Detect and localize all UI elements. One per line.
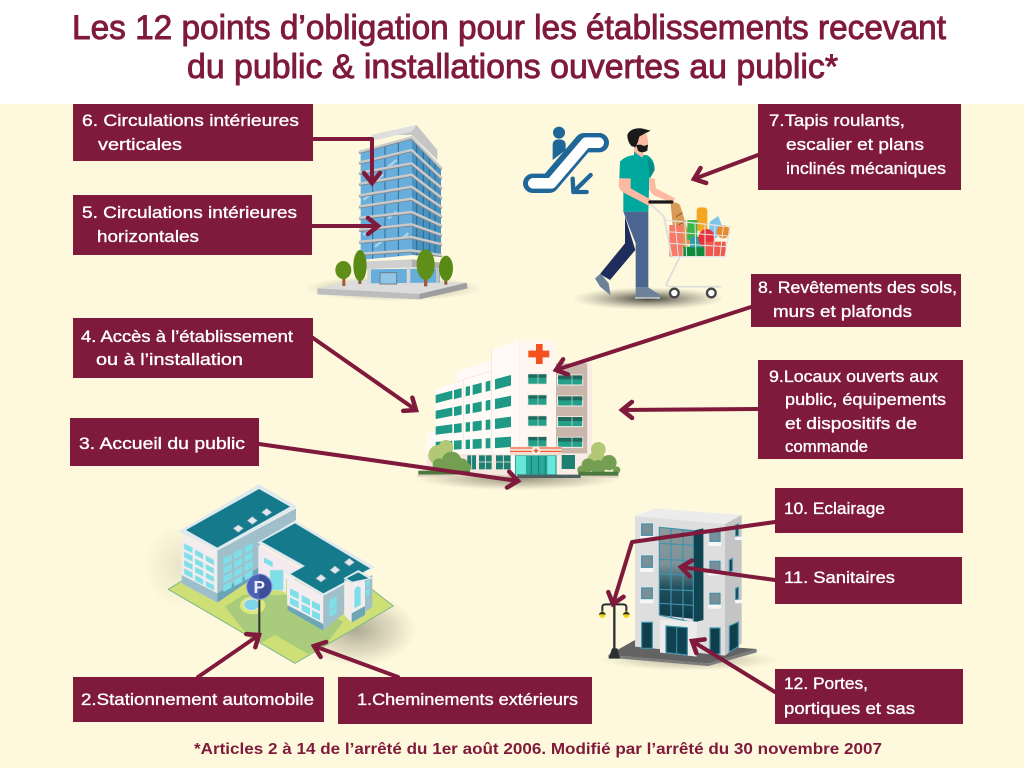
label 7: 7.Tapis roulants, bbox=[769, 111, 905, 130]
shopping cart bbox=[650, 202, 730, 297]
arrow: 6 to tower bbox=[313, 139, 372, 183]
illustration: office tower bbox=[303, 125, 483, 301]
street lamp bbox=[599, 604, 630, 659]
parking sign: P bbox=[254, 577, 265, 597]
label 7 bbox=[758, 104, 961, 190]
label 12 bbox=[775, 669, 963, 724]
arrow: 3 to hospital bbox=[259, 444, 518, 481]
label 1: 1.Cheminements extérieurs bbox=[357, 690, 578, 709]
label 4: ou à l’installation bbox=[96, 350, 243, 369]
right block bbox=[257, 521, 375, 631]
label 8: 8. Revêtements des sols, bbox=[758, 278, 957, 297]
icon: escalator bbox=[533, 127, 599, 192]
footnote: *Articles 2 à 14 de l’arrêté du 1er août 2006. Modifié par l’arrêté du 30 novembre 2007 bbox=[194, 741, 882, 758]
label 5: horizontales bbox=[97, 227, 199, 246]
label 11 bbox=[775, 557, 962, 604]
illustration: apartment building with lamp bbox=[599, 508, 780, 671]
label 3: 3. Accueil du public bbox=[79, 434, 246, 453]
label 8: murs et plafonds bbox=[773, 302, 912, 321]
label 2: 2.Stationnement automobile bbox=[81, 690, 314, 709]
label 9: 9.Locaux ouverts aux bbox=[769, 367, 939, 386]
label 9 bbox=[758, 360, 963, 459]
arrow: 12 to door bbox=[692, 641, 775, 692]
arrow: 10 to lamp bbox=[613, 522, 775, 604]
label 6: verticales bbox=[98, 135, 182, 154]
label 2 bbox=[73, 677, 324, 722]
label 11: 11. Sanitaires bbox=[784, 568, 895, 587]
title: du public & installations ouvertes au public* bbox=[187, 48, 838, 86]
label 10: 10. Eclairage bbox=[784, 499, 885, 518]
label 10 bbox=[775, 488, 963, 533]
arrow: 7 to shopper bbox=[694, 155, 758, 179]
label 9: public, équipements bbox=[785, 390, 946, 409]
label 3 bbox=[70, 418, 259, 466]
label 1 bbox=[338, 677, 592, 724]
label 12: portiques et sas bbox=[784, 699, 915, 718]
label 5: 5. Circulations intérieures bbox=[82, 203, 297, 222]
label 7: escalier et plans bbox=[786, 135, 924, 154]
label 8 bbox=[751, 274, 961, 327]
illustration: building and parking bbox=[143, 484, 417, 667]
label 6 bbox=[73, 104, 313, 161]
label 9: commande bbox=[785, 437, 868, 456]
label 6: 6. Circulations intérieures bbox=[82, 111, 299, 130]
arrow: 5 to tower bbox=[312, 224, 378, 228]
label 12: 12. Portes, bbox=[784, 674, 868, 693]
arrow: 4 to hospital bbox=[313, 338, 416, 410]
arrow: 11 to building bbox=[681, 567, 775, 580]
title bbox=[72, 9, 947, 86]
illustration: hospital bbox=[415, 340, 622, 490]
left block bbox=[178, 484, 297, 603]
shopper bbox=[595, 128, 675, 298]
illustration: shopper and escalator bbox=[533, 127, 730, 310]
label 9: et dispositifs de bbox=[785, 414, 917, 433]
red cross bbox=[528, 344, 549, 364]
title: Les 12 points d’obligation pour les établissements recevant bbox=[72, 9, 947, 47]
arrow: 1 to pathway bbox=[314, 646, 398, 677]
shrubs bbox=[428, 440, 606, 470]
arrow: 8 to hospital bbox=[556, 307, 751, 370]
parking sign bbox=[247, 574, 272, 634]
arrow: 9 to hospital bbox=[622, 409, 758, 410]
fountain bbox=[240, 596, 265, 614]
label 4 bbox=[73, 318, 313, 378]
label 4: 4. Accès à l’établissement bbox=[81, 327, 293, 346]
label 7: inclinés mécaniques bbox=[786, 159, 946, 178]
label 5 bbox=[73, 195, 312, 255]
arrow: 2 to parking bbox=[198, 635, 259, 677]
